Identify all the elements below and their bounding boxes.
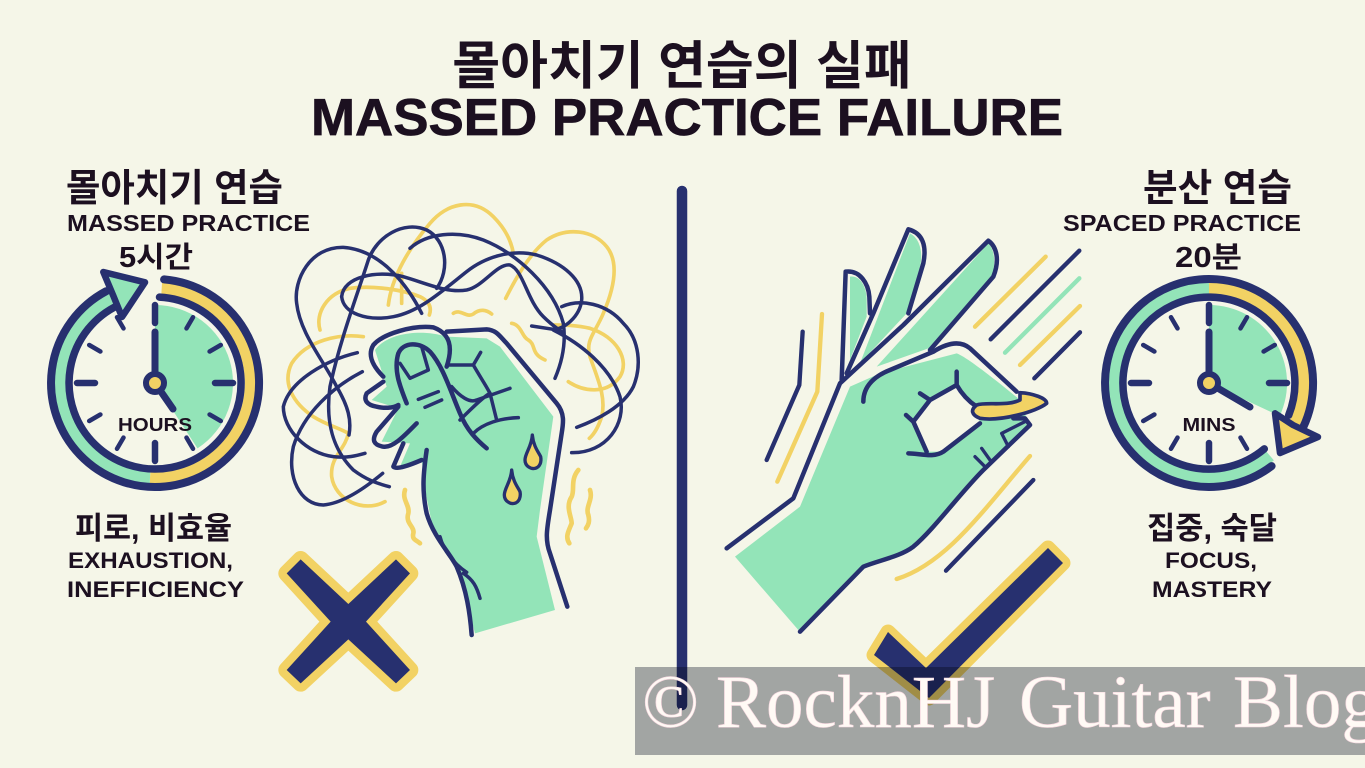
caption: focus bbox=[1147, 511, 1277, 602]
caption: exhaustion: 피로, 비효율 bbox=[75, 511, 232, 546]
fist outline bbox=[365, 327, 567, 635]
clock hands bbox=[155, 332, 173, 409]
clock hands bbox=[1209, 332, 1250, 407]
heading: spaced practice: 20분 bbox=[1175, 242, 1242, 274]
heading: spaced practice bbox=[1063, 168, 1301, 274]
divider line bbox=[677, 191, 687, 705]
heading: massed practice bbox=[66, 168, 310, 274]
hand fill bbox=[735, 353, 1028, 630]
sweat squiggles bbox=[404, 470, 591, 543]
speed lines bbox=[767, 251, 1080, 579]
heading: massed practice: 몰아치기 연습 bbox=[66, 168, 283, 210]
icon: 5 hour clock bbox=[51, 272, 259, 487]
sweat drops bbox=[525, 435, 541, 469]
yellow scribbles bbox=[288, 205, 623, 506]
caption: focus: 집중, 숙달 bbox=[1147, 511, 1277, 546]
heading: massed practice: MASSED PRACTICE bbox=[67, 210, 310, 236]
watermark bbox=[635, 661, 1365, 755]
navy scribbles bbox=[283, 227, 638, 505]
clock ticks bbox=[1131, 305, 1287, 461]
icon: check mark bbox=[874, 548, 1063, 698]
watermark: Guitar bbox=[1019, 661, 1211, 744]
hand outline bbox=[727, 229, 1030, 632]
caption: focus: MASTERY bbox=[1152, 577, 1272, 602]
illustration: OK hand gesture with speed lines bbox=[727, 229, 1080, 632]
caption: focus: FOCUS, bbox=[1165, 548, 1257, 573]
heading: spaced practice: 분산 연습 bbox=[1143, 168, 1292, 210]
icon: 5 hour clock: HOURS bbox=[118, 415, 192, 435]
fist creases bbox=[400, 347, 518, 598]
caption: exhaustion bbox=[67, 511, 244, 602]
title: MASSED PRACTICE FAILURE bbox=[311, 89, 1063, 147]
title: 몰아치기 연습의 실패 bbox=[452, 38, 912, 96]
hand finger ring hole bbox=[915, 386, 980, 452]
clock ticks bbox=[77, 305, 233, 461]
heading: spaced practice: SPACED PRACTICE bbox=[1063, 210, 1301, 236]
watermark: RocknHJ bbox=[716, 661, 995, 744]
icon: 20 minute clock bbox=[1105, 279, 1318, 487]
heading: massed practice: 5시간 bbox=[119, 241, 193, 274]
fingernail bbox=[973, 393, 1047, 419]
arrow head bbox=[1275, 413, 1318, 453]
watermark: © bbox=[642, 661, 699, 744]
arrow head bbox=[103, 272, 145, 317]
illustration: tangled scribble and clenched fist bbox=[283, 205, 638, 635]
caption: exhaustion: INEFFICIENCY bbox=[67, 577, 244, 602]
icon: X mark bbox=[287, 559, 410, 683]
title bbox=[311, 38, 1063, 147]
fist fill bbox=[372, 333, 555, 633]
caption: exhaustion: EXHAUSTION, bbox=[68, 548, 233, 573]
icon: 20 minute clock: MINS bbox=[1182, 415, 1236, 435]
